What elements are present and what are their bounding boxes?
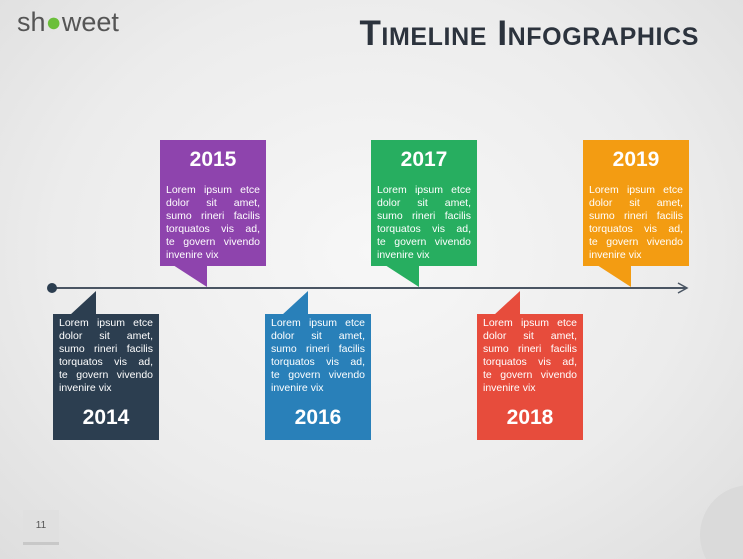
- box 2019: Lorem ipsum etce: [589, 184, 683, 196]
- box 2014: Lorem ipsum etce: [59, 317, 153, 329]
- box 2014: invenire vix: [59, 382, 112, 394]
- box 2014: te govern vivendo: [59, 369, 153, 381]
- box 2015: sumo rineri facilis: [166, 210, 260, 222]
- box 2016: 2016: [295, 406, 341, 429]
- box 2015: Lorem ipsum etce: [166, 184, 260, 196]
- box 2015: dolor sit amet,: [166, 197, 260, 209]
- box 2016: sumo rineri facilis: [271, 343, 365, 355]
- box 2014: 2014: [83, 406, 129, 429]
- box 2015: invenire vix: [166, 249, 219, 261]
- logo: sh●weet: [17, 7, 119, 37]
- box 2017: te govern vivendo: [377, 236, 471, 248]
- box 2017: 2017: [401, 148, 447, 171]
- box 2018: 2018: [507, 406, 553, 429]
- box 2014: [53, 314, 159, 440]
- box 2019: [583, 140, 689, 266]
- box 2016: te govern vivendo: [271, 369, 365, 381]
- box 2015: te govern vivendo: [166, 236, 260, 248]
- box 2018: torquatos vis ad,: [483, 356, 577, 368]
- box 2016: Lorem ipsum etce: [271, 317, 365, 329]
- page number: 11: [36, 520, 46, 531]
- box 2019: dolor sit amet,: [589, 197, 683, 209]
- box 2014: sumo rineri facilis: [59, 343, 153, 355]
- box 2019: 2019: [613, 148, 659, 171]
- box 2017: dolor sit amet,: [377, 197, 471, 209]
- page number: [23, 510, 59, 545]
- box 2019: invenire vix: [589, 249, 642, 261]
- box 2015: torquatos vis ad,: [166, 223, 260, 235]
- box 2017: invenire vix: [377, 249, 430, 261]
- box 2018: Lorem ipsum etce: [483, 317, 577, 329]
- box 2018: [477, 314, 583, 440]
- box 2017: sumo rineri facilis: [377, 210, 471, 222]
- title: Timeline Infographics: [359, 14, 699, 53]
- watermark: [702, 487, 739, 520]
- box 2014: torquatos vis ad,: [59, 356, 153, 368]
- box 2017: Lorem ipsum etce: [377, 184, 471, 196]
- box 2019: torquatos vis ad,: [589, 223, 683, 235]
- box 2018: invenire vix: [483, 382, 536, 394]
- box 2019: sumo rineri facilis: [589, 210, 683, 222]
- box 2016: [265, 314, 371, 440]
- box 2014: dolor sit amet,: [59, 330, 153, 342]
- box 2016: dolor sit amet,: [271, 330, 365, 342]
- box 2015: 2015: [190, 148, 236, 171]
- box 2018: sumo rineri facilis: [483, 343, 577, 355]
- box 2018: dolor sit amet,: [483, 330, 577, 342]
- box 2017: torquatos vis ad,: [377, 223, 471, 235]
- box 2015: [160, 140, 266, 266]
- box 2016: invenire vix: [271, 382, 324, 394]
- box 2017: [371, 140, 477, 266]
- box 2018: te govern vivendo: [483, 369, 577, 381]
- box 2016: torquatos vis ad,: [271, 356, 365, 368]
- box 2019: te govern vivendo: [589, 236, 683, 248]
